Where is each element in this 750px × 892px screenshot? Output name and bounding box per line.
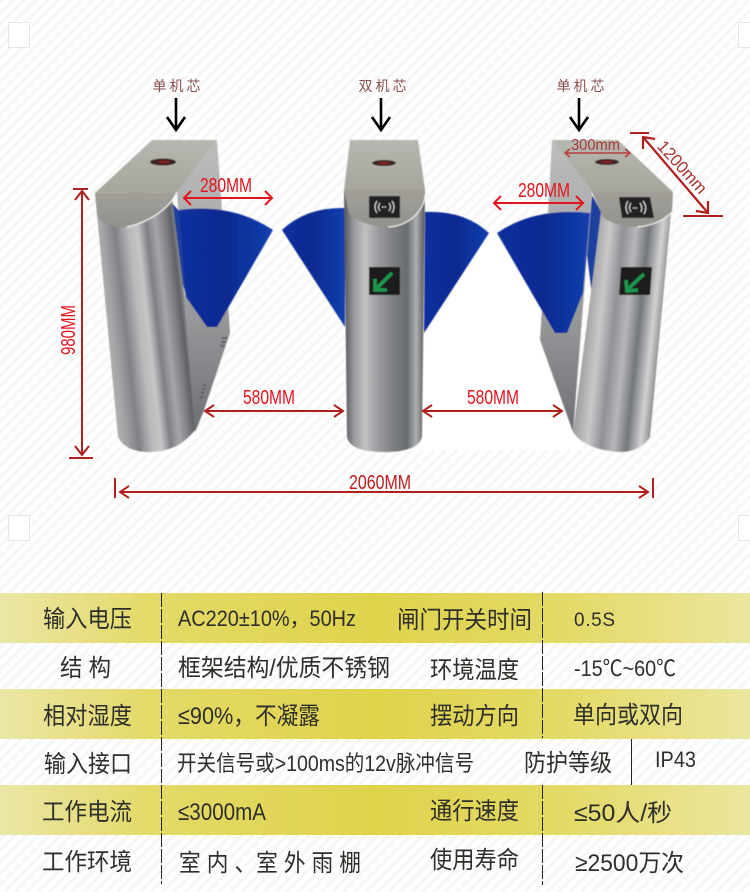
row 4 text: 开关信号或>100ms的12v脉冲信号 <box>177 751 474 776</box>
row 1 text: 输入电压 <box>43 606 132 633</box>
label: double core: 双机芯 <box>358 78 410 94</box>
right gate top face <box>552 140 673 192</box>
row 6 text <box>42 847 684 877</box>
row 1 text: 闸门开关时间 <box>397 607 532 634</box>
row 1 text: AC220±10%，50Hz <box>178 606 356 631</box>
row 3 text: 摆动方向 <box>430 703 519 730</box>
middle gate card reader <box>369 196 400 218</box>
left gate blue fin <box>179 209 273 327</box>
dimension: 580MM left: 580MM <box>243 387 295 409</box>
row band 3 <box>0 689 750 739</box>
spec table <box>0 592 750 885</box>
row 5 text: 工作电流 <box>42 799 132 826</box>
row 6 text: 工作环境 <box>42 849 132 876</box>
left gate side panel <box>177 140 230 432</box>
row 6 text: 使用寿命 <box>430 847 519 874</box>
column divider 2 <box>542 592 544 885</box>
right gate body <box>573 192 673 452</box>
left gate cap <box>95 192 177 227</box>
arrow: right core <box>570 98 588 130</box>
row 3 text: 单向或双向 <box>573 702 683 729</box>
row 3 text <box>43 702 683 730</box>
label: single core left: 单机芯 <box>152 78 204 94</box>
row 2 text: 环境温度 <box>430 657 519 684</box>
row 5 text: 通行速度 <box>430 798 519 825</box>
arrow: middle core <box>372 98 390 130</box>
dimension: 580MM right <box>423 387 562 417</box>
row 1 text <box>43 606 615 634</box>
dimension: 280MM right <box>494 180 583 210</box>
right gate cap highlight <box>637 212 672 227</box>
row 6 text: 室 内 、室 外 雨 棚 <box>179 850 361 877</box>
row 4 text <box>44 747 696 778</box>
dimension: 580MM right: 580MM <box>467 387 519 409</box>
dimension: 2060MM <box>115 472 653 498</box>
dimension: 280MM right: 280MM <box>518 180 570 202</box>
middle gate cap <box>344 190 425 227</box>
middle gate top face <box>344 140 425 190</box>
dimension: 280MM left: 280MM <box>200 175 252 197</box>
right gate blue strip <box>587 195 604 295</box>
right gate direction arrow <box>619 267 652 295</box>
row 2 text: 框架结构/优质不锈钢 <box>178 655 390 682</box>
dimension: 280MM left <box>184 175 272 205</box>
placeholder box: top right <box>738 22 750 48</box>
gate: middle double-core <box>282 140 489 452</box>
right gate sensor <box>595 159 619 165</box>
middle gate right fin <box>424 212 489 333</box>
row 4 text: 防护等级 <box>524 750 612 777</box>
row 5 text: ≤3000mA <box>178 799 266 826</box>
left gate body <box>95 193 195 452</box>
left gate sensor <box>150 158 176 166</box>
row 5 text: ≤50人/秒 <box>574 800 672 827</box>
right gate blue fin <box>497 212 590 333</box>
dimension: 1200mm <box>630 133 723 216</box>
placeholder box: lower left <box>8 516 30 540</box>
row 6 text: ≥2500万次 <box>575 850 684 877</box>
gate: left single-core <box>95 140 273 452</box>
row 3 text: 相对湿度 <box>43 703 132 730</box>
row 4 text: 输入接口 <box>44 751 132 778</box>
right gate card reader <box>619 197 654 218</box>
right gate side panel <box>540 140 592 432</box>
column divider 1 <box>160 593 162 884</box>
row 2 text <box>60 655 676 684</box>
column divider row 4 <box>630 739 632 785</box>
placeholder box: lower right <box>738 516 750 540</box>
dimension: 2060MM: 2060MM <box>349 472 411 494</box>
left gate vents <box>200 338 227 397</box>
middle gate cap highlight <box>388 195 425 227</box>
white area between gates <box>420 233 585 450</box>
row 5 text <box>42 798 672 827</box>
row 3 text: ≤90%，不凝露 <box>178 703 320 730</box>
dimension: 1200mm: 1200mm <box>653 137 711 198</box>
middle gate direction arrow <box>369 267 400 295</box>
middle gate left fin <box>282 208 345 327</box>
row band 1 <box>0 593 750 643</box>
placeholder box: top left <box>8 22 30 48</box>
right gate cap <box>592 192 673 227</box>
row 2 text: 结 构 <box>60 655 111 682</box>
left gate top face <box>95 140 217 193</box>
arrow: left core <box>167 98 185 130</box>
dimension: 980MM <box>58 189 93 458</box>
dimension: 300mm: 300mm <box>571 137 620 154</box>
left gate blue strip <box>172 203 187 297</box>
row 1 text: 0.5S <box>574 610 615 631</box>
left gate cap highlight <box>127 192 177 227</box>
row 4 text: IP43 <box>655 747 696 772</box>
dimension: 980MM: 980MM <box>58 305 80 355</box>
dimension: 300mm <box>565 137 630 157</box>
label: single core right: 单机芯 <box>556 78 608 94</box>
middle gate sensor <box>372 160 396 166</box>
row 2 text: -15℃~60℃ <box>574 656 676 681</box>
row band 5 <box>0 785 750 835</box>
dimension: 580MM left <box>205 387 343 417</box>
middle gate body <box>344 190 425 452</box>
gate: right single-core <box>497 140 673 452</box>
